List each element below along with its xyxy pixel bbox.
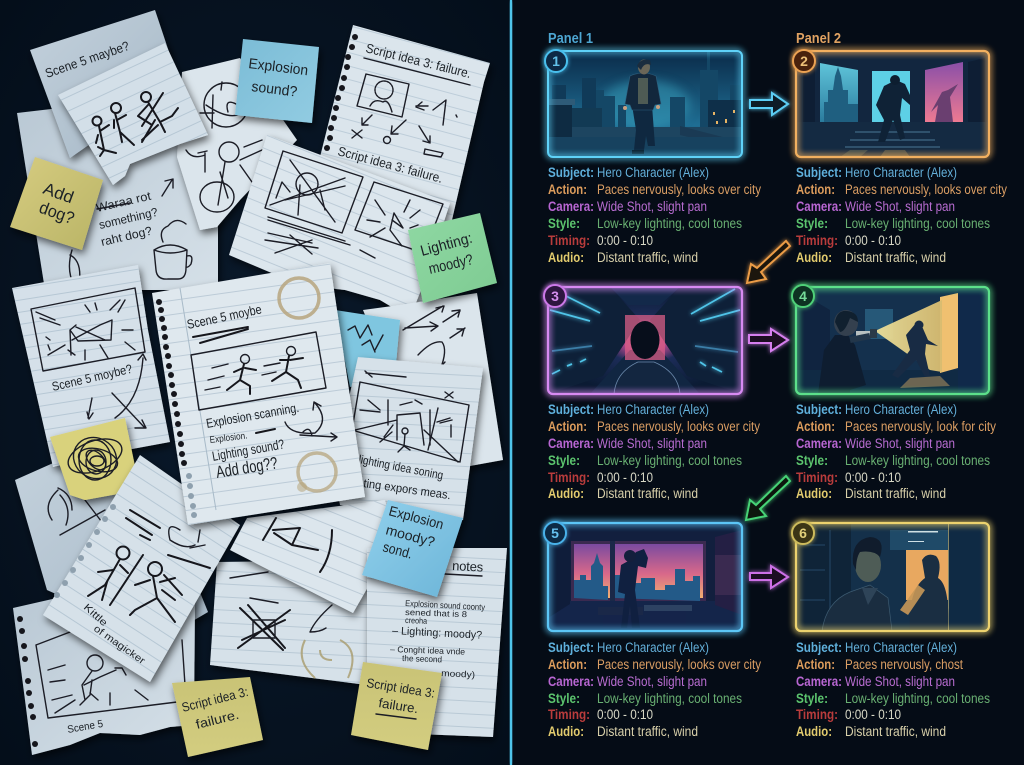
- info block panel 6: Audio:: [796, 724, 832, 739]
- sheet: project notes list: creoha: [405, 615, 427, 626]
- info block panel 6: [796, 640, 990, 739]
- sheet: project notes list: Explosion sound coonty: [405, 598, 486, 612]
- sheet: project notes list: [367, 548, 507, 737]
- sheet: bottom-left torn scene 5 frame: Scene 5: [66, 718, 104, 736]
- info block panel 1: Camera:: [548, 199, 594, 214]
- storyboard frame 1: rooftop: [548, 51, 742, 157]
- info block panel 4: Wide Shot, slight pan: [845, 436, 955, 451]
- sticky note: explosion sound: sound?: [251, 79, 298, 101]
- info block panel 5: Camera:: [548, 674, 594, 689]
- info block panel 6: Low-key lighting, cool tones: [845, 691, 990, 706]
- info block panel 5: 0:00 - 0:10: [597, 707, 653, 722]
- badge 6: 6: [799, 525, 807, 541]
- badge 1: 1: [552, 53, 560, 69]
- sticky note: scribble: [50, 418, 140, 500]
- sheet: main spiral notebook page: Scene 5 moybe: [186, 301, 263, 332]
- sticky note: add dog: Add: [41, 179, 76, 207]
- sheet: main spiral notebook page: [152, 263, 365, 525]
- info block panel 1: Subject:: [548, 165, 594, 180]
- sticky note: explosion sound: [235, 39, 319, 123]
- info block panel 5: Hero Character (Alex): [597, 640, 709, 655]
- sheet: spiral page with running figures: Kittle: [81, 602, 110, 629]
- sheet: corridor sketch: ting expors meas.: [363, 476, 452, 502]
- info block panel 6: Hero Character (Alex): [845, 640, 957, 655]
- sheet: spiral notebook script idea: [320, 25, 490, 320]
- sheet: spiral notebook script idea: Script idea 3: failure.: [336, 143, 444, 186]
- info block panel 1: Wide Shot, slight pan: [597, 199, 707, 214]
- sheet: something rat dog with coffee: Waraa rot: [95, 189, 153, 215]
- sheet: project notes list: notes: [452, 558, 484, 575]
- arrow: panel 1 to panel 2: [750, 93, 788, 115]
- panel 2 heading: Panel 2: [796, 31, 841, 47]
- storyboard frame 3: neon corridor: [548, 287, 742, 394]
- sheet: lower-left plain sketch: [15, 460, 208, 640]
- info block panel 4: Audio:: [796, 486, 832, 501]
- sheet: plain note scene 5 maybe: Scene 5 maybe?: [43, 38, 131, 81]
- info block panel 1: Action:: [548, 182, 587, 197]
- sticky note: script idea bottom left: [172, 677, 263, 757]
- info block panel 5: Wide Shot, slight pan: [597, 674, 707, 689]
- info block panel 1: [548, 165, 761, 265]
- info block panel 4: Paces nervously, look for city: [845, 419, 996, 434]
- info block panel 1: Hero Character (Alex): [597, 165, 709, 180]
- sticky note: script idea bottom left: failure.: [194, 707, 240, 732]
- sheet: spiral page with running figures: of magicker: [91, 623, 147, 667]
- info block panel 3: Wide Shot, slight pan: [597, 436, 707, 451]
- info block panel 3: Audio:: [548, 486, 584, 501]
- info block panel 2: Wide Shot, slight pan: [845, 199, 955, 214]
- info block panel 2: Action:: [796, 182, 835, 197]
- sheet: project notes list: – Lighting: moody?: [392, 625, 482, 642]
- info block panel 2: Low-key lighting, cool tones: [845, 216, 990, 231]
- sticky note: add dog: [10, 157, 103, 250]
- info block panel 5: Style:: [548, 691, 580, 706]
- info block panel 2: Audio:: [796, 250, 832, 265]
- sheet: left storyboard with arrows: Scene 5 moybe?: [51, 362, 134, 394]
- info block panel 3: Timing:: [548, 470, 590, 485]
- info block panel 3: Camera:: [548, 436, 594, 451]
- info block panel 5: Paces nervously, looks over city: [597, 657, 761, 672]
- info block panel 5: Action:: [548, 657, 587, 672]
- arrow: panel 2 to panel 3: [747, 241, 790, 283]
- info block panel 4: Distant traffic, wind: [845, 486, 946, 501]
- info block panel 3: Subject:: [548, 402, 594, 417]
- info block panel 3: [548, 402, 760, 501]
- info block panel 6: 0:00 - 0:10: [845, 707, 901, 722]
- sticky note: explosion moody sond: moody?: [384, 521, 437, 550]
- info block panel 5: Distant traffic, wind: [597, 724, 698, 739]
- info block panel 6: Paces nervously, chost: [845, 657, 963, 672]
- sheet: lined page with stick figures: [58, 43, 208, 185]
- sheet: spiral notebook script idea: Script idea 3: failure.: [364, 40, 473, 81]
- sheet: arrows page: [363, 293, 503, 475]
- sheet: bottom-left torn scene 5 frame: [13, 595, 195, 755]
- info block panel 3: Distant traffic, wind: [597, 486, 698, 501]
- sticky note: add dog: dog?: [37, 198, 77, 228]
- info block panel 6: Camera:: [796, 674, 842, 689]
- sticky note: script idea bottom right: [351, 662, 442, 750]
- info block panel 3: 0:00 - 0:10: [597, 470, 653, 485]
- info block panel 1: Low-key lighting, cool tones: [597, 216, 742, 231]
- badge 4: [792, 285, 814, 307]
- info block panel 4: Hero Character (Alex): [845, 402, 957, 417]
- badge 6: [792, 522, 814, 544]
- badge 4: 4: [799, 288, 807, 304]
- sticky note: explosion moody sond: sond.: [381, 538, 414, 562]
- info block panel 2: Hero Character (Alex): [845, 165, 957, 180]
- info block panel 1: 0:00 - 0:10: [597, 233, 653, 248]
- badge 1: [545, 50, 567, 72]
- info block panel 1: Distant traffic, wind: [597, 250, 698, 265]
- sheet: something rat dog with coffee: something?: [98, 205, 159, 232]
- info block panel 4: Low-key lighting, cool tones: [845, 453, 990, 468]
- arrow: panel 5 to panel 6: [750, 566, 788, 588]
- info block panel 4: Timing:: [796, 470, 838, 485]
- info block panel 5: Subject:: [548, 640, 594, 655]
- sticky note: lighting moody: moody?: [427, 251, 475, 278]
- info block panel 3: Style:: [548, 453, 580, 468]
- storyboard frame 6: confrontation: [796, 523, 989, 631]
- info block panel 2: [796, 165, 1007, 265]
- badge 5: [544, 522, 566, 544]
- info block panel 2: Subject:: [796, 165, 842, 180]
- sheet: main spiral notebook page: Explosion scanning.: [205, 400, 300, 431]
- sheet: something rat dog with coffee: raht dog?: [100, 224, 154, 249]
- info block panel 2: Style:: [796, 216, 828, 231]
- sticky note: explosion sound: Explosion: [248, 56, 309, 79]
- sheet: lower lined page with x sketch and stain: [210, 560, 380, 685]
- info block panel 4: [796, 402, 996, 501]
- sheet: project notes list: sened that is 8: [405, 607, 468, 619]
- info block panel 6: Action:: [796, 657, 835, 672]
- badge 3: 3: [551, 288, 559, 304]
- info block panel 3: Low-key lighting, cool tones: [597, 453, 742, 468]
- sticky note: explosion moody sond: [362, 500, 463, 597]
- info block panel 1: Timing:: [548, 233, 590, 248]
- info block panel 4: Camera:: [796, 436, 842, 451]
- sheet: corridor sketch: lighting idea soning: [357, 452, 445, 482]
- info block panel 6: Style:: [796, 691, 828, 706]
- sheet: spiral page with running figures: [43, 455, 240, 682]
- info block panel 6: Subject:: [796, 640, 842, 655]
- info block panel 1: Style:: [548, 216, 580, 231]
- sheet: project notes list: the second: [402, 653, 443, 664]
- badge 2: [793, 50, 815, 72]
- info block panel 3: Action:: [548, 419, 587, 434]
- info block panel 3: Paces nervously, looks over city: [597, 419, 760, 434]
- sheet: something rat dog with coffee: [17, 100, 218, 290]
- sticky note: script idea bottom right: failure.: [378, 695, 419, 716]
- badge 5: 5: [551, 525, 559, 541]
- info block panel 2: Timing:: [796, 233, 838, 248]
- info block panel 5: [548, 640, 761, 739]
- info block panel 1: Paces nervously, looks over city: [597, 182, 761, 197]
- info block panel 5: Low-key lighting, cool tones: [597, 691, 742, 706]
- panel: messy notes collage: [10, 10, 507, 757]
- info block panel 2: Camera:: [796, 199, 842, 214]
- arrow: panel 3 to panel 4: [749, 329, 788, 351]
- glowing center divider: [510, 0, 512, 765]
- info block panel 4: Subject:: [796, 402, 842, 417]
- info block panel 5: Timing:: [548, 707, 590, 722]
- sticky note: lighting moody: [408, 213, 497, 303]
- panel 1 heading: Panel 1: [548, 31, 593, 47]
- sheet: two-frame storyboard: [229, 135, 450, 318]
- badge 3: [544, 285, 566, 307]
- badge 2: 2: [800, 53, 808, 69]
- info block panel 6: Distant traffic, wind: [845, 724, 946, 739]
- sheet: main spiral notebook page: Lighting sound?: [211, 437, 285, 464]
- info block panel 2: Distant traffic, wind: [845, 250, 946, 265]
- sticky note: script idea bottom left: Script idea 3:: [180, 684, 250, 715]
- sheet: main spiral notebook page: Explosion.: [209, 430, 248, 446]
- sticky note: lighting moody: Lighting:: [419, 230, 474, 260]
- sheet: circle and arrows sketch: [177, 58, 297, 230]
- info block panel 3: Hero Character (Alex): [597, 402, 709, 417]
- sheet: main spiral notebook page: Add dog??: [215, 453, 279, 482]
- storyboard frame 2: window room: [796, 51, 989, 157]
- info block panel 6: Timing:: [796, 707, 838, 722]
- sheet: left storyboard with arrows: [12, 265, 170, 467]
- storyboard frame 5: sunset window: [548, 523, 742, 631]
- info block panel 4: Style:: [796, 453, 828, 468]
- arrow: panel 4 to panel 5: [746, 476, 790, 520]
- info block panel 6: Wide Shot, slight pan: [845, 674, 955, 689]
- sheet: plain note scene 5 maybe: [30, 10, 170, 158]
- sticky note: script idea bottom right: Script idea 3:: [366, 675, 436, 701]
- sticky note: explosion moody sond: Explosion: [387, 502, 445, 532]
- sheet: project notes list: – Conght idea vnde: [390, 644, 465, 657]
- info block panel 2: 0:00 - 0:10: [845, 233, 901, 248]
- info block panel 1: Audio:: [548, 250, 584, 265]
- sticky note: small blue scribble: [335, 310, 400, 387]
- storyboard frame 4: flashlight: [796, 287, 989, 394]
- sheet: page with cone sketch: [230, 500, 395, 613]
- sheet: project notes list: moody): [441, 668, 475, 680]
- sheet: corridor sketch: [333, 357, 483, 520]
- info block panel 5: Audio:: [548, 724, 584, 739]
- info block panel 4: 0:00 - 0:10: [845, 470, 901, 485]
- info block panel 4: Action:: [796, 419, 835, 434]
